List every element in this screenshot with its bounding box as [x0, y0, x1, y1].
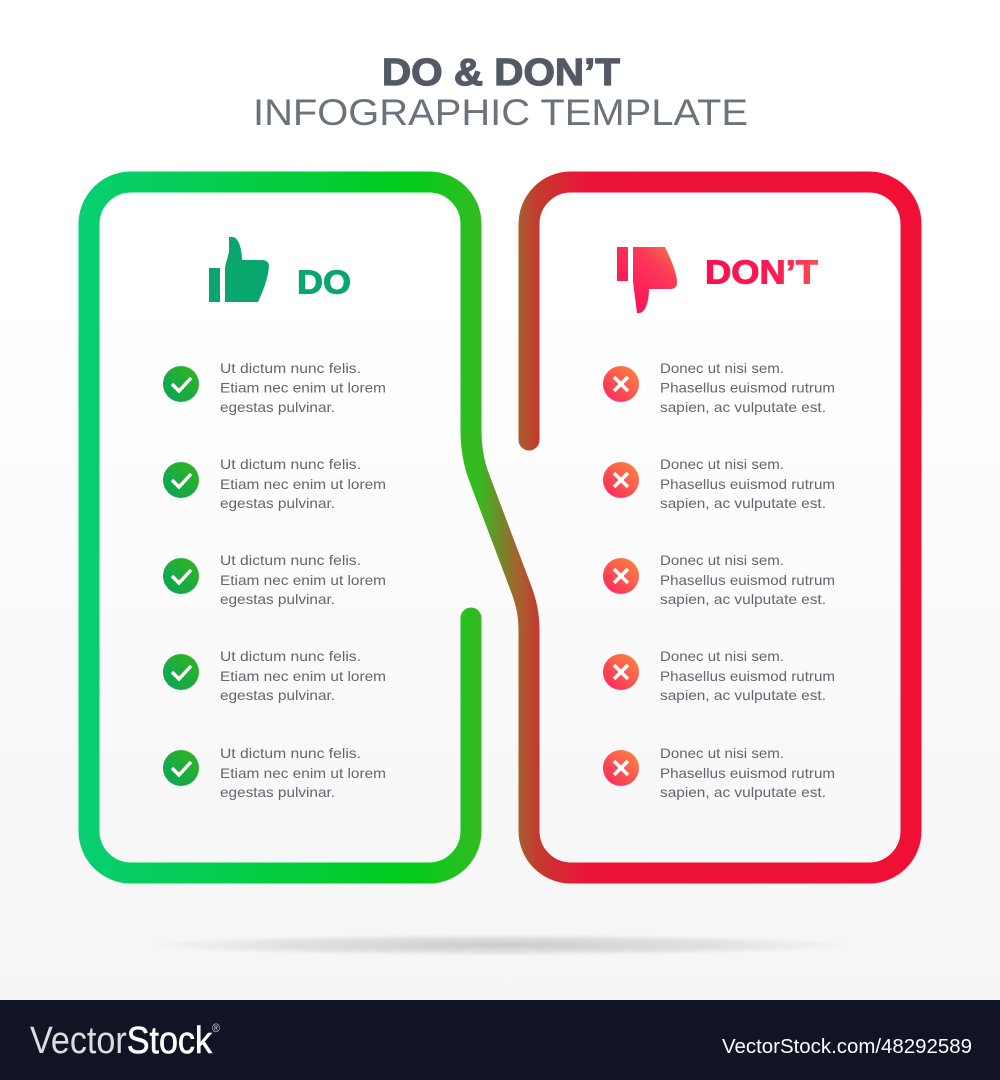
don't item 1: Phasellus euismod rutrum — [660, 380, 835, 396]
icon: thumbs down — [617, 247, 677, 313]
do item 4: Etiam nec enim ut lorem — [220, 668, 386, 684]
do item 2: Etiam nec enim ut lorem — [220, 476, 386, 492]
panel: do frame — [89, 182, 471, 873]
ground shadow — [145, 934, 855, 956]
don't item 2: Donec ut nisi sem. — [660, 456, 784, 472]
do item 4: egestas pulvinar. — [220, 687, 335, 703]
don't item 3: Phasellus euismod rutrum — [660, 572, 835, 588]
don't item 2: Phasellus euismod rutrum — [660, 476, 835, 492]
footer url: VectorStock.com/48292589 — [722, 1036, 972, 1058]
do item 2: Ut dictum nunc felis. — [220, 456, 361, 472]
do item 1: Etiam nec enim ut lorem — [220, 380, 386, 396]
don't item 4: Donec ut nisi sem. — [660, 648, 784, 664]
do item 1: Ut dictum nunc felis. — [220, 360, 361, 376]
don't item 3: Donec ut nisi sem. — [660, 552, 784, 568]
do item 2: egestas pulvinar. — [220, 495, 335, 511]
don't item 1: Donec ut nisi sem. — [660, 360, 784, 376]
do item 4 — [163, 648, 386, 703]
footer logo: VectorStock — [30, 1020, 222, 1062]
do item 1 — [163, 360, 386, 415]
don't item 4: Phasellus euismod rutrum — [660, 668, 835, 684]
panel: don't frame — [529, 182, 911, 873]
footer logo: ® — [212, 1021, 220, 1035]
list: don't items — [603, 360, 835, 800]
heading: do: DO — [297, 264, 351, 300]
do item 3: egestas pulvinar. — [220, 591, 335, 607]
don't item 5: Donec ut nisi sem. — [660, 745, 784, 761]
do item 1: egestas pulvinar. — [220, 399, 335, 415]
don't item 5: sapien, ac vulputate est. — [660, 784, 826, 800]
title: INFOGRAPHIC TEMPLATE — [253, 92, 748, 133]
don't item 1: sapien, ac vulputate est. — [660, 399, 826, 415]
do item 3 — [163, 552, 386, 607]
heading: don't: DON’T — [705, 254, 818, 290]
do item 5: Etiam nec enim ut lorem — [220, 765, 386, 781]
don't item 5 — [603, 745, 835, 800]
don't item 5: Phasellus euismod rutrum — [660, 765, 835, 781]
do item 5 — [163, 745, 386, 800]
do item 4: Ut dictum nunc felis. — [220, 648, 361, 664]
don't item 1 — [603, 360, 835, 415]
do item 3: Etiam nec enim ut lorem — [220, 572, 386, 588]
connector: s-curve between panels — [471, 430, 529, 631]
do item 3: Ut dictum nunc felis. — [220, 552, 361, 568]
list: do items — [163, 360, 386, 800]
don't item 3: sapien, ac vulputate est. — [660, 591, 826, 607]
title: DO & DON’T — [382, 52, 620, 94]
do item 5: egestas pulvinar. — [220, 784, 335, 800]
footer bar — [0, 1000, 1000, 1080]
title — [253, 52, 748, 133]
do item 5: Ut dictum nunc felis. — [220, 745, 361, 761]
don't item 4: sapien, ac vulputate est. — [660, 687, 826, 703]
do item 2 — [163, 456, 386, 511]
don't item 2 — [603, 456, 835, 511]
don't item 3 — [603, 552, 835, 607]
don't item 4 — [603, 648, 835, 703]
don't item 2: sapien, ac vulputate est. — [660, 495, 826, 511]
icon: thumbs up — [209, 237, 269, 302]
